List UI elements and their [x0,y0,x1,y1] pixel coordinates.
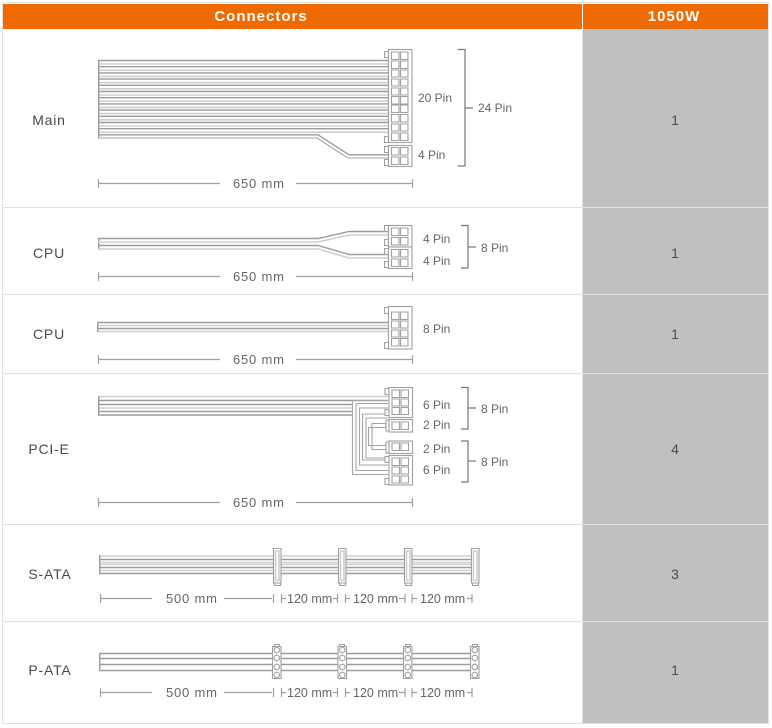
label: 8 Pin: 8 Pin [423,322,450,336]
header: 1050W [583,4,768,29]
connector: 4 pin bottom [384,247,412,268]
dimension: 650 mm: 650 mm [233,495,285,510]
bracket: 24 Pin: 24 Pin [478,101,512,115]
connector: 20 pin [384,50,412,142]
row label: P-ATA: P-ATA [28,662,72,678]
connector: 6 pin top [385,388,412,418]
panel: CPU 4+4 [33,226,508,284]
dimension: 650 mm: 650 mm [233,176,285,191]
label: 6 Pin bottom: 6 Pin [423,463,450,477]
wires: main bundle [98,60,388,158]
connector: 6 pin bottom [385,456,412,485]
panel: PCI-E [28,388,508,510]
label: 20 Pin: 20 Pin [418,91,452,105]
connector: 4 pin [384,146,412,166]
bracket: 8 Pin top [461,388,508,429]
label: 2 Pin top: 2 Pin [423,418,450,432]
bracket: 8 Pin [461,226,508,268]
header: Connectors [3,4,582,29]
quantity: CPU 8: 1 [671,326,679,342]
wires: PCI-E nested looms [98,396,388,474]
label: 4 Pin lower: 4 Pin [423,254,450,268]
connector: 2 pin top [386,420,412,432]
dimension: 120 mm: 120 mm [287,592,332,606]
dimension: 120 mm: 120 mm [287,686,332,700]
dimension: 650 mm [98,269,412,284]
bracket: 8 Pin: 8 Pin [481,241,508,255]
bracket: 8 Pin bottom: 8 Pin [481,455,508,469]
panel: CPU 8 pin [33,306,450,367]
dimension: 120 mm: 120 mm [353,686,398,700]
quantity: PCI-E: 4 [671,441,679,457]
panel: P-ATA [28,644,479,700]
connectors: S-ATA [274,548,479,586]
dimension: 500 mm: 500 mm [166,685,218,700]
wires: S-ATA [99,555,475,574]
panel: Main [32,50,512,191]
label: 4 Pin upper: 4 Pin [423,232,450,246]
row label: S-ATA: S-ATA [28,566,72,582]
dimension: 120 mm: 120 mm [420,686,465,700]
dimension: 650 mm [98,495,412,510]
dimension: 650 mm: 650 mm [233,352,285,367]
dimension: 650 mm [98,352,412,367]
row label: PCI-E: PCI-E [28,441,70,457]
header: 1050W: 1050W [648,8,700,25]
quantity: Main: 1 [671,112,679,128]
connectors: P-ATA [272,644,479,678]
dimension: 650 mm [98,176,412,191]
wires: P-ATA [99,653,474,671]
wires: CPU straight [97,322,388,332]
quantity: CPU 4+4: 1 [671,245,679,261]
dimension: 500 mm: 500 mm [166,591,218,606]
bracket: 24 Pin [458,50,512,166]
bracket: 8 Pin bottom [461,441,508,482]
label: 4 Pin: 4 Pin [418,148,445,162]
connector: 8 pin [384,306,412,349]
row label: CPU: CPU [33,245,65,261]
label: 2 Pin bottom: 2 Pin [423,442,450,456]
row label: Main: Main [32,112,66,128]
connector: 2 pin bottom [386,441,412,454]
bracket: 8 Pin top: 8 Pin [481,402,508,416]
connector: 4 pin top [384,226,412,247]
quantity: P-ATA: 1 [671,662,679,678]
wires: CPU split [98,232,388,258]
quantity: S-ATA: 3 [671,566,679,582]
label: 6 Pin top: 6 Pin [423,398,450,412]
header: Connectors: Connectors [214,8,308,25]
panel: S-ATA [28,548,479,606]
row label: CPU: CPU [33,326,65,342]
dimension: 120 mm: 120 mm [420,592,465,606]
dimension: 500 mm [100,685,274,700]
dimension: 500 mm [100,591,274,606]
dimension: 650 mm: 650 mm [233,269,285,284]
dimension: 120 mm: 120 mm [353,592,398,606]
